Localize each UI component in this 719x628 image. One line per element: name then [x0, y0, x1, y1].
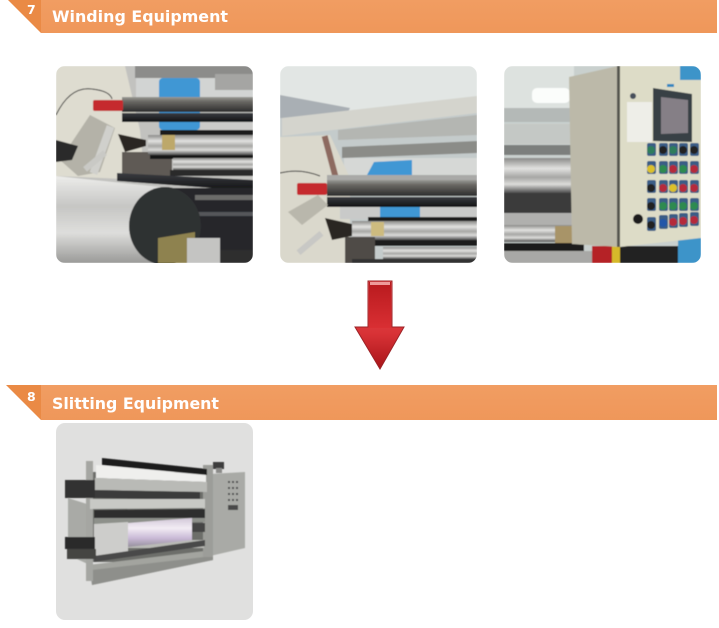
upper rollers [102, 458, 207, 475]
section header: Slitting Equipment [6, 385, 717, 420]
photo: winding machine with large film roll [56, 66, 253, 265]
photo: winding machine rollers and upper beam [280, 66, 477, 263]
photo: winding machine control cabinet [504, 66, 701, 263]
photo: slitting machine [56, 423, 253, 620]
section number 7: 7 [27, 2, 36, 17]
control buttons [633, 143, 699, 231]
lower rollers [94, 509, 205, 518]
section header: Winding Equipment [8, 0, 717, 33]
machine frame [68, 498, 90, 565]
section number 8: 8 [27, 389, 36, 404]
film roll [128, 518, 192, 547]
side black end blocks [65, 480, 95, 498]
control cabinet [210, 472, 245, 556]
arrow: red downward [355, 281, 404, 369]
heading: Slitting Equipment: Slitting Equipment [52, 394, 219, 413]
heading: Winding Equipment: Winding Equipment [52, 7, 228, 26]
